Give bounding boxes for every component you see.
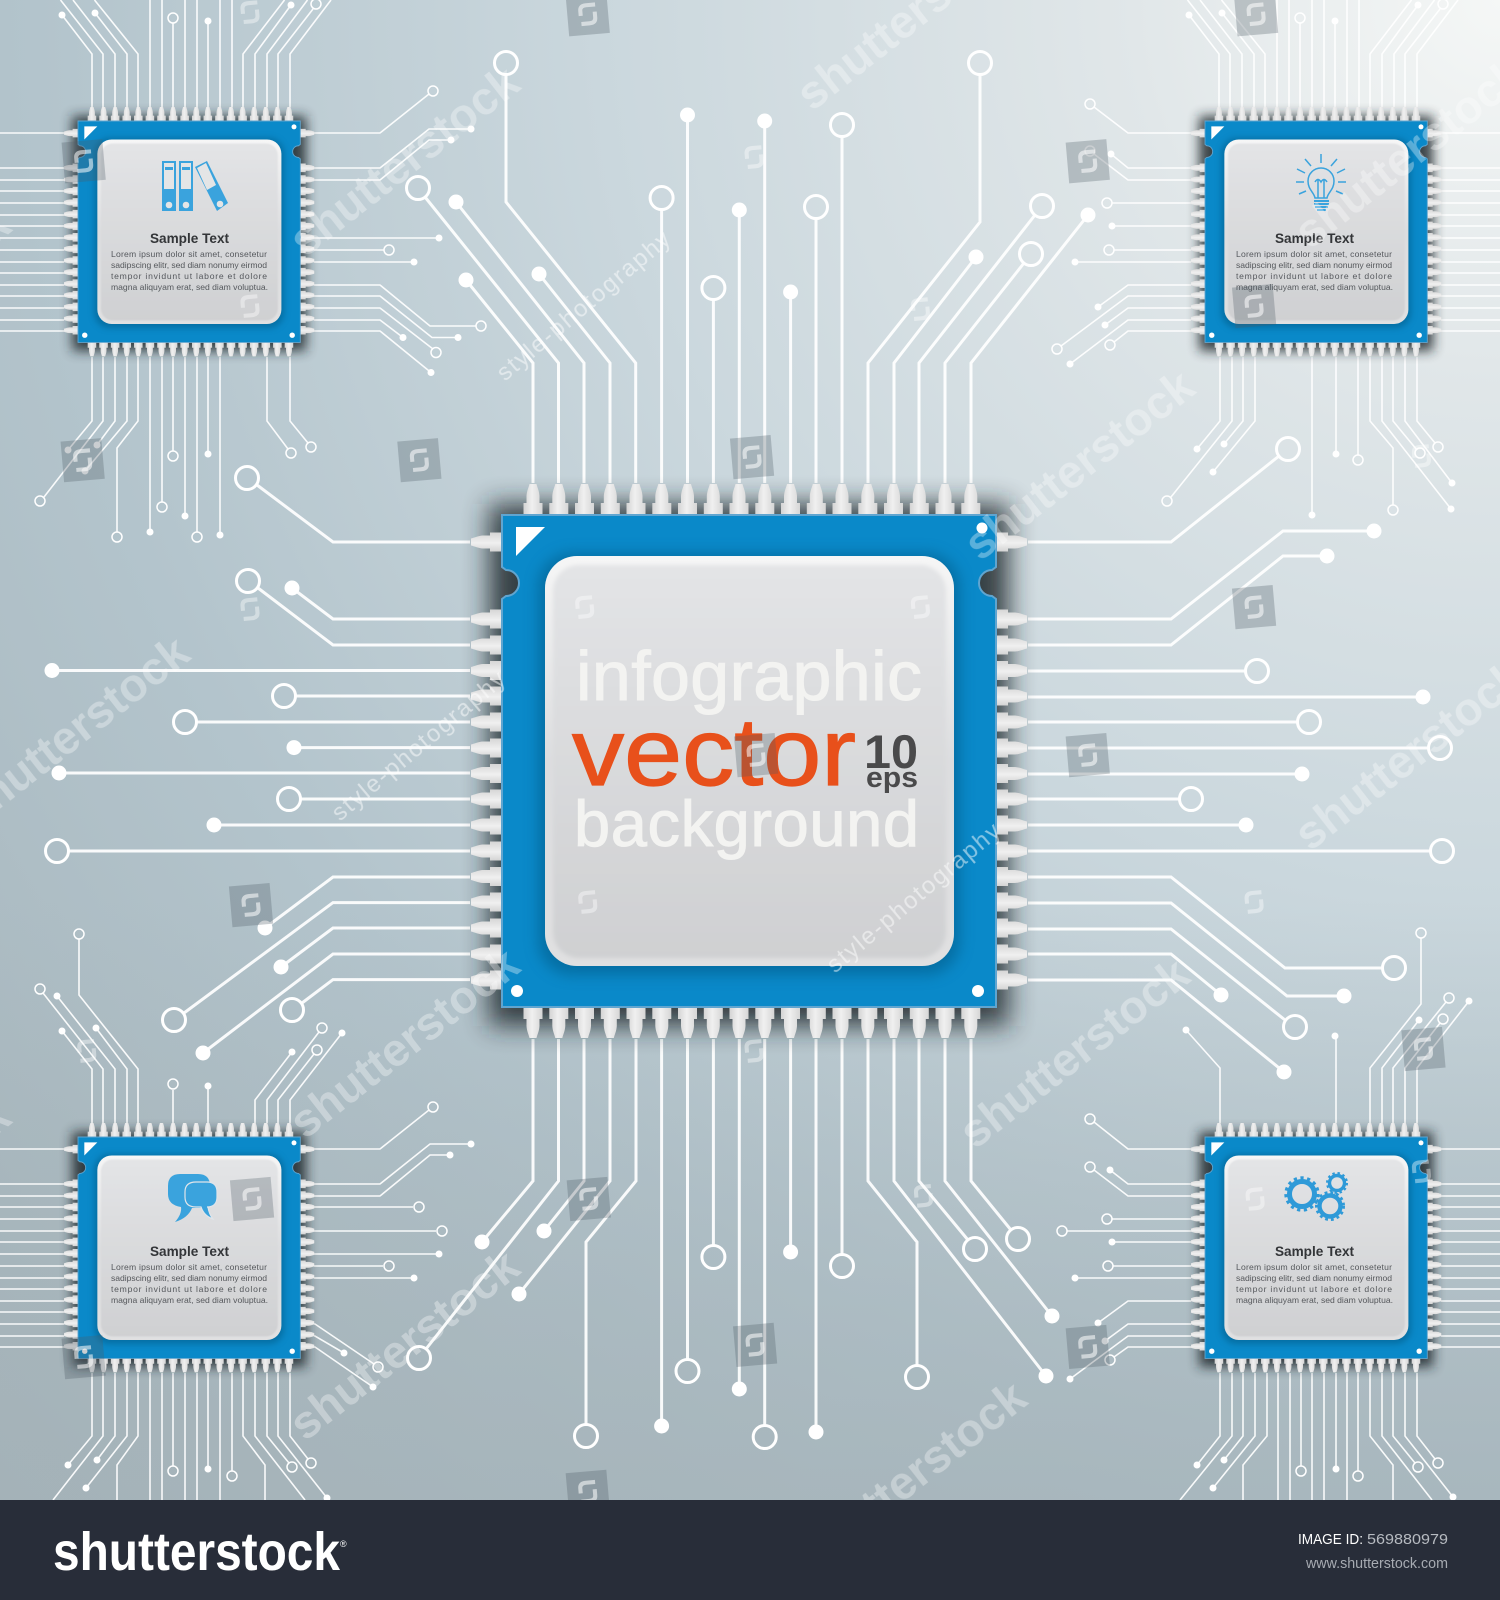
top-right chip traces <box>1052 0 1500 518</box>
text block <box>111 1244 268 1305</box>
watermark text: shutterstock <box>786 1370 1036 1581</box>
text block <box>111 231 268 292</box>
icon: gears <box>1286 1173 1347 1220</box>
heading: eps: eps <box>866 762 918 794</box>
panel: top-right chip <box>1191 107 1441 356</box>
heading: infographic: infographic <box>576 637 922 715</box>
watermark text: shutterstock <box>279 937 529 1148</box>
watermark text: shutterstock <box>949 947 1199 1158</box>
icon: binders <box>162 161 228 211</box>
bottom-left chip traces <box>0 929 474 1502</box>
text block <box>1236 231 1393 292</box>
heading: vector: vector <box>572 699 856 806</box>
text block <box>1236 1244 1393 1305</box>
top-left chip traces <box>0 0 486 542</box>
watermark: style-photography: style-photography <box>822 818 1006 979</box>
watermark: style-photography <box>327 226 1006 979</box>
watermark: style-photography: style-photography <box>327 666 511 827</box>
panel: top-left chip <box>64 107 314 356</box>
image id number: 569880979 <box>1367 1531 1448 1548</box>
registered mark: ® <box>340 1539 347 1549</box>
watermark text: shutterstock <box>954 359 1204 570</box>
heading: 10: 10 <box>864 725 918 778</box>
watermark text: shutterstock <box>279 1239 529 1450</box>
panel: central chip <box>471 484 1027 1038</box>
panel: bottom-right chip <box>1191 1123 1441 1372</box>
icon: speech bubbles <box>168 1174 217 1222</box>
icon: light bulb <box>1296 154 1346 210</box>
watermark text: shutterstock <box>279 55 529 266</box>
bottom-right chip traces <box>1057 928 1500 1500</box>
heading: background: background <box>574 787 919 860</box>
footer logo: shutterstock <box>53 1522 341 1582</box>
watermark: style-photography: style-photography <box>492 226 676 387</box>
panel: bottom-left chip <box>64 1123 314 1372</box>
image id label: IMAGE ID: <box>1298 1531 1363 1548</box>
website: www.shutterstock.com <box>1305 1555 1448 1572</box>
footer bar <box>0 1500 1500 1600</box>
